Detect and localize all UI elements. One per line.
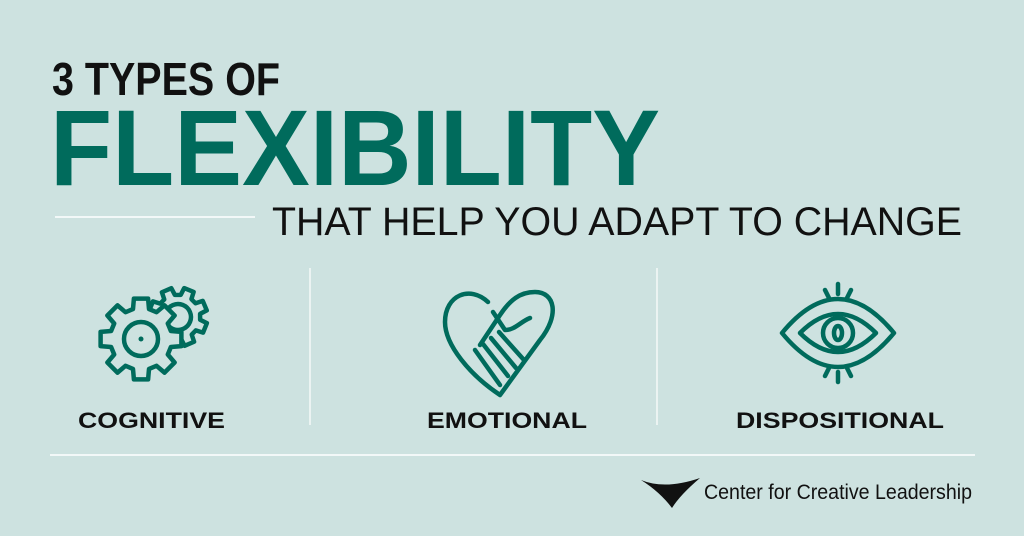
title line 1: 3 TYPES OF [52, 53, 280, 105]
label: dispositional: DISPOSITIONAL [736, 408, 944, 433]
logo: Center for Creative Leadership [704, 481, 972, 504]
label: emotional: EMOTIONAL [427, 408, 587, 433]
logo [641, 478, 972, 508]
subtitle: THAT HELP YOU ADAPT TO CHANGE [272, 200, 962, 244]
icon: gears [101, 279, 216, 379]
icon: eye [782, 284, 894, 382]
icon: heart handshake [445, 292, 553, 395]
title main: FLEXIBILITY [50, 87, 660, 208]
label: cognitive: COGNITIVE [78, 408, 225, 433]
